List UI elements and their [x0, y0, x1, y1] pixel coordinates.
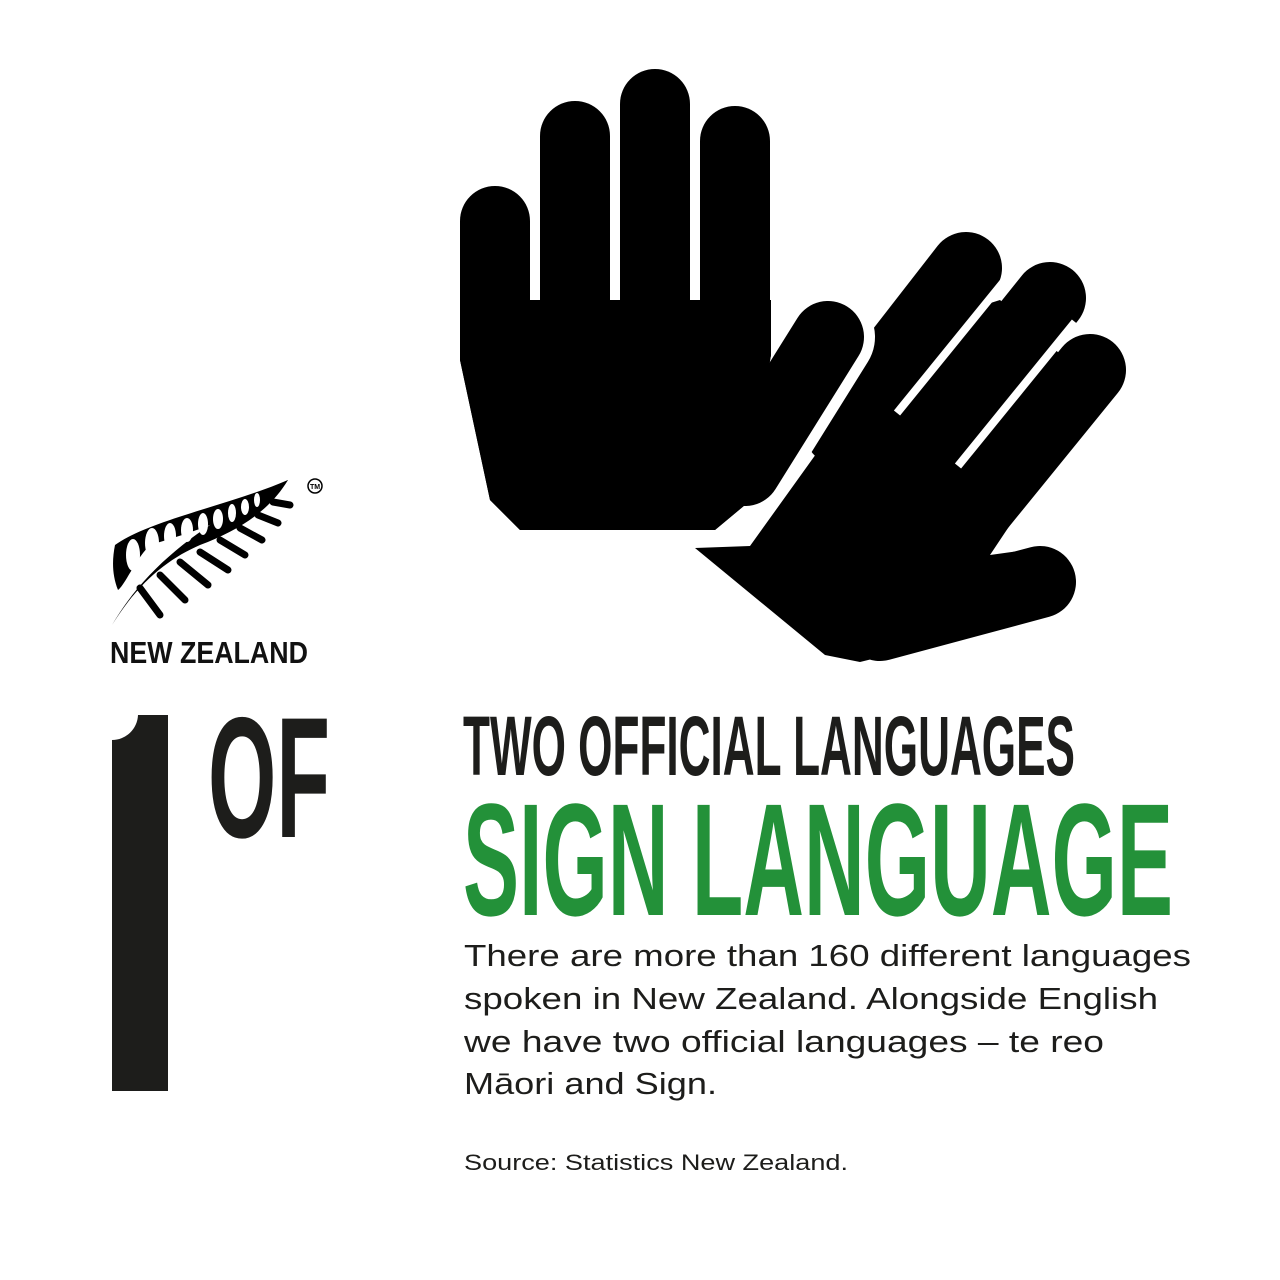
body text: There are more than 160 different languages [464, 938, 1191, 973]
logo text: NEW ZEALAND [110, 635, 308, 670]
big number 1 [112, 715, 168, 1094]
body text: Māori and Sign. [464, 1066, 717, 1101]
logo: silver fern: TM [310, 484, 320, 491]
body text: we have two official languages – te reo [463, 1024, 1104, 1059]
right hand [695, 268, 1100, 662]
source: Source: Statistics New Zealand. [464, 1150, 848, 1175]
body text: spoken in New Zealand. Alongside English [464, 981, 1158, 1016]
text: OF: OF [208, 682, 330, 874]
logo: silver fern [110, 479, 322, 670]
left hand [460, 300, 828, 530]
trademark [308, 479, 322, 493]
body text [463, 938, 1191, 1101]
icon: two hands [460, 69, 1100, 662]
